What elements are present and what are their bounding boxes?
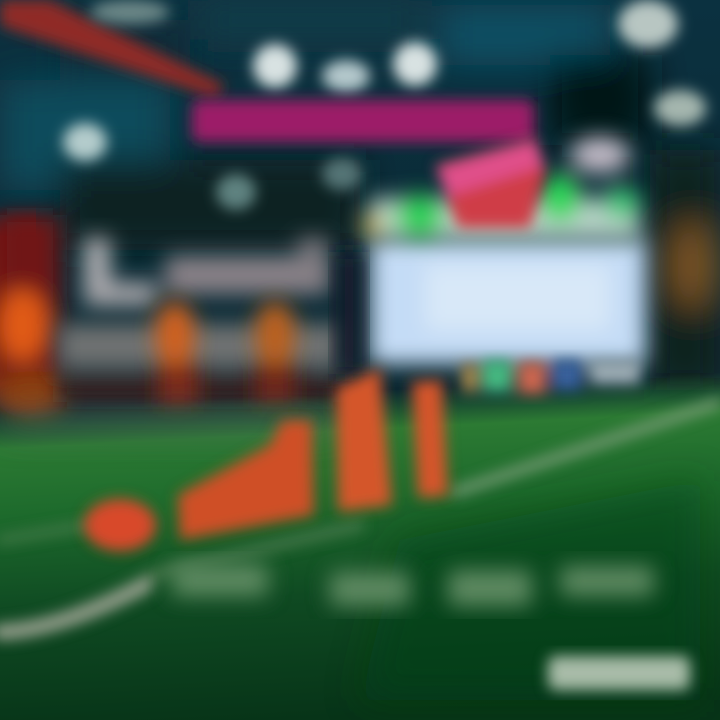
grass field <box>0 370 720 720</box>
pink badge <box>436 138 546 228</box>
white data panel <box>362 137 646 394</box>
field lines <box>0 403 718 632</box>
bar 4 <box>336 368 392 512</box>
stadium lights <box>63 0 706 210</box>
title banner <box>192 100 534 142</box>
axis labels <box>172 564 654 606</box>
bars 2 and 3 <box>178 420 314 540</box>
dark divider beside panel <box>336 252 362 374</box>
bar 5 <box>412 380 448 498</box>
colored legend blocks <box>462 360 640 394</box>
bar 1 <box>84 499 156 551</box>
red roof beam <box>0 0 225 98</box>
heading on dark panel <box>84 238 330 306</box>
scoreboard orange columns <box>155 301 295 407</box>
panel header blobs <box>362 137 640 240</box>
footer button <box>548 656 690 690</box>
orange bar chart <box>84 368 448 551</box>
left red scoreboard column <box>0 205 68 419</box>
lower scoreboard band <box>58 301 342 407</box>
